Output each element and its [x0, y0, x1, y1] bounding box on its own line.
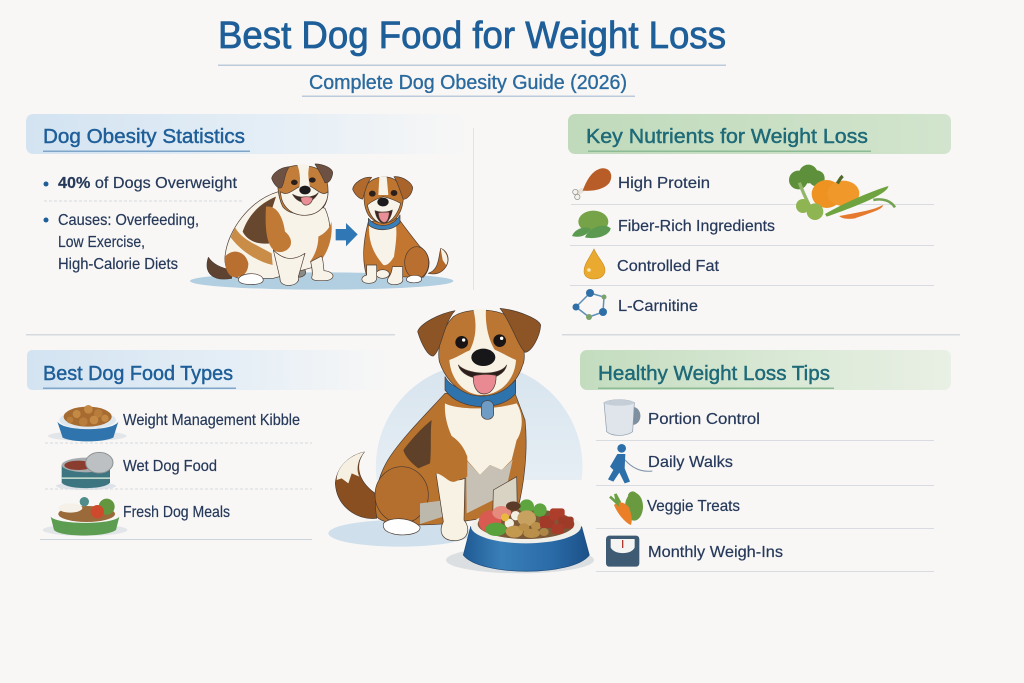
heading: healthy weight loss tips [580, 350, 951, 390]
body [375, 393, 526, 525]
heading: dog obesity statistics [26, 114, 470, 154]
icon: chicken drumstick [573, 168, 611, 200]
row: fresh dog meals [40, 497, 312, 540]
row: high protein: High Protein [618, 175, 710, 192]
arrow: weight reduction [336, 223, 358, 246]
row: l-carnitine: L-Carnitine [618, 298, 698, 315]
heading: best dog food types [27, 350, 392, 390]
panel: healthy weight loss tips [580, 350, 951, 572]
icon: carrot and greens [610, 491, 643, 525]
row: l-carnitine [572, 289, 698, 320]
icon: walking person with leash [608, 444, 652, 483]
icon: molecule [572, 289, 607, 320]
row: daily walks: Daily Walks [648, 454, 733, 471]
ground shadow [190, 272, 453, 290]
row: high protein [571, 168, 925, 205]
row: controlled fat [570, 249, 934, 286]
collar [445, 377, 516, 407]
food bowl [446, 499, 594, 573]
row: portion control: Portion Control [648, 411, 760, 428]
background circle [376, 364, 582, 480]
icon: open can [56, 452, 116, 490]
icon: oil drop [584, 249, 605, 279]
icon: leafy greens [572, 211, 611, 238]
icon: measuring cup [604, 400, 640, 435]
subtitle: Complete Dog Obesity Guide (2026) [309, 72, 627, 94]
head [278, 165, 328, 214]
ground shadow [328, 520, 472, 547]
illustration: overweight dog to fit dog [190, 164, 453, 290]
row: portion control [596, 400, 934, 441]
heading: key nutrients [568, 114, 951, 154]
bullet: causes: Causes: Overfeeding, [58, 212, 199, 229]
row: weight management kibble [45, 405, 312, 443]
row: wet dog food [45, 452, 312, 490]
heading: best dog food types: Best Dog Food Types [43, 363, 233, 385]
row: daily walks [596, 444, 934, 486]
row: veggie treats: Veggie Treats [647, 498, 740, 515]
row: fiber-rich ingredients [570, 211, 934, 246]
bullet: causes: Low Exercise, [58, 234, 145, 251]
bullet: 40 percent overweight [44, 175, 243, 201]
head [439, 310, 524, 396]
heading: key nutrients: Key Nutrients for Weight Loss [586, 126, 868, 148]
row: monthly weigh-ins: Monthly Weigh-Ins [648, 544, 783, 561]
row: veggie treats [596, 491, 934, 529]
panel: best dog food types [27, 350, 392, 540]
icon: scale [606, 536, 639, 567]
bullet: causes [44, 212, 199, 273]
panel: key nutrients [568, 114, 951, 320]
icon: fresh meal bowl [43, 497, 127, 536]
icon: fit dog [353, 177, 448, 285]
tail [335, 308, 541, 541]
row: controlled fat: Controlled Fat [617, 258, 720, 275]
row: wet dog food: Wet Dog Food [123, 458, 217, 475]
row: fiber-rich ingredients: Fiber-Rich Ingredients [618, 218, 775, 235]
heading: dog obesity statistics: Dog Obesity Statistics [43, 126, 245, 148]
heading: healthy weight loss tips: Healthy Weight Loss Tips [598, 363, 830, 385]
icon: overweight dog [207, 164, 333, 285]
row: weight management kibble: Weight Management Kibble [123, 412, 300, 429]
row: fresh dog meals: Fresh Dog Meals [123, 504, 230, 521]
bullet: causes: High-Calorie Diets [58, 256, 178, 273]
title: Best Dog Food for Weight Loss [218, 15, 726, 57]
panel: dog obesity statistics [26, 114, 470, 290]
illustration: happy dog with food bowl [328, 308, 594, 573]
mouth [458, 365, 507, 379]
icon: vegetables group [789, 165, 895, 220]
row: monthly weigh-ins [596, 536, 934, 572]
bullet: 40 percent overweight: 40% of Dogs Overweight [58, 175, 238, 192]
icon: kibble bowl [48, 405, 127, 441]
